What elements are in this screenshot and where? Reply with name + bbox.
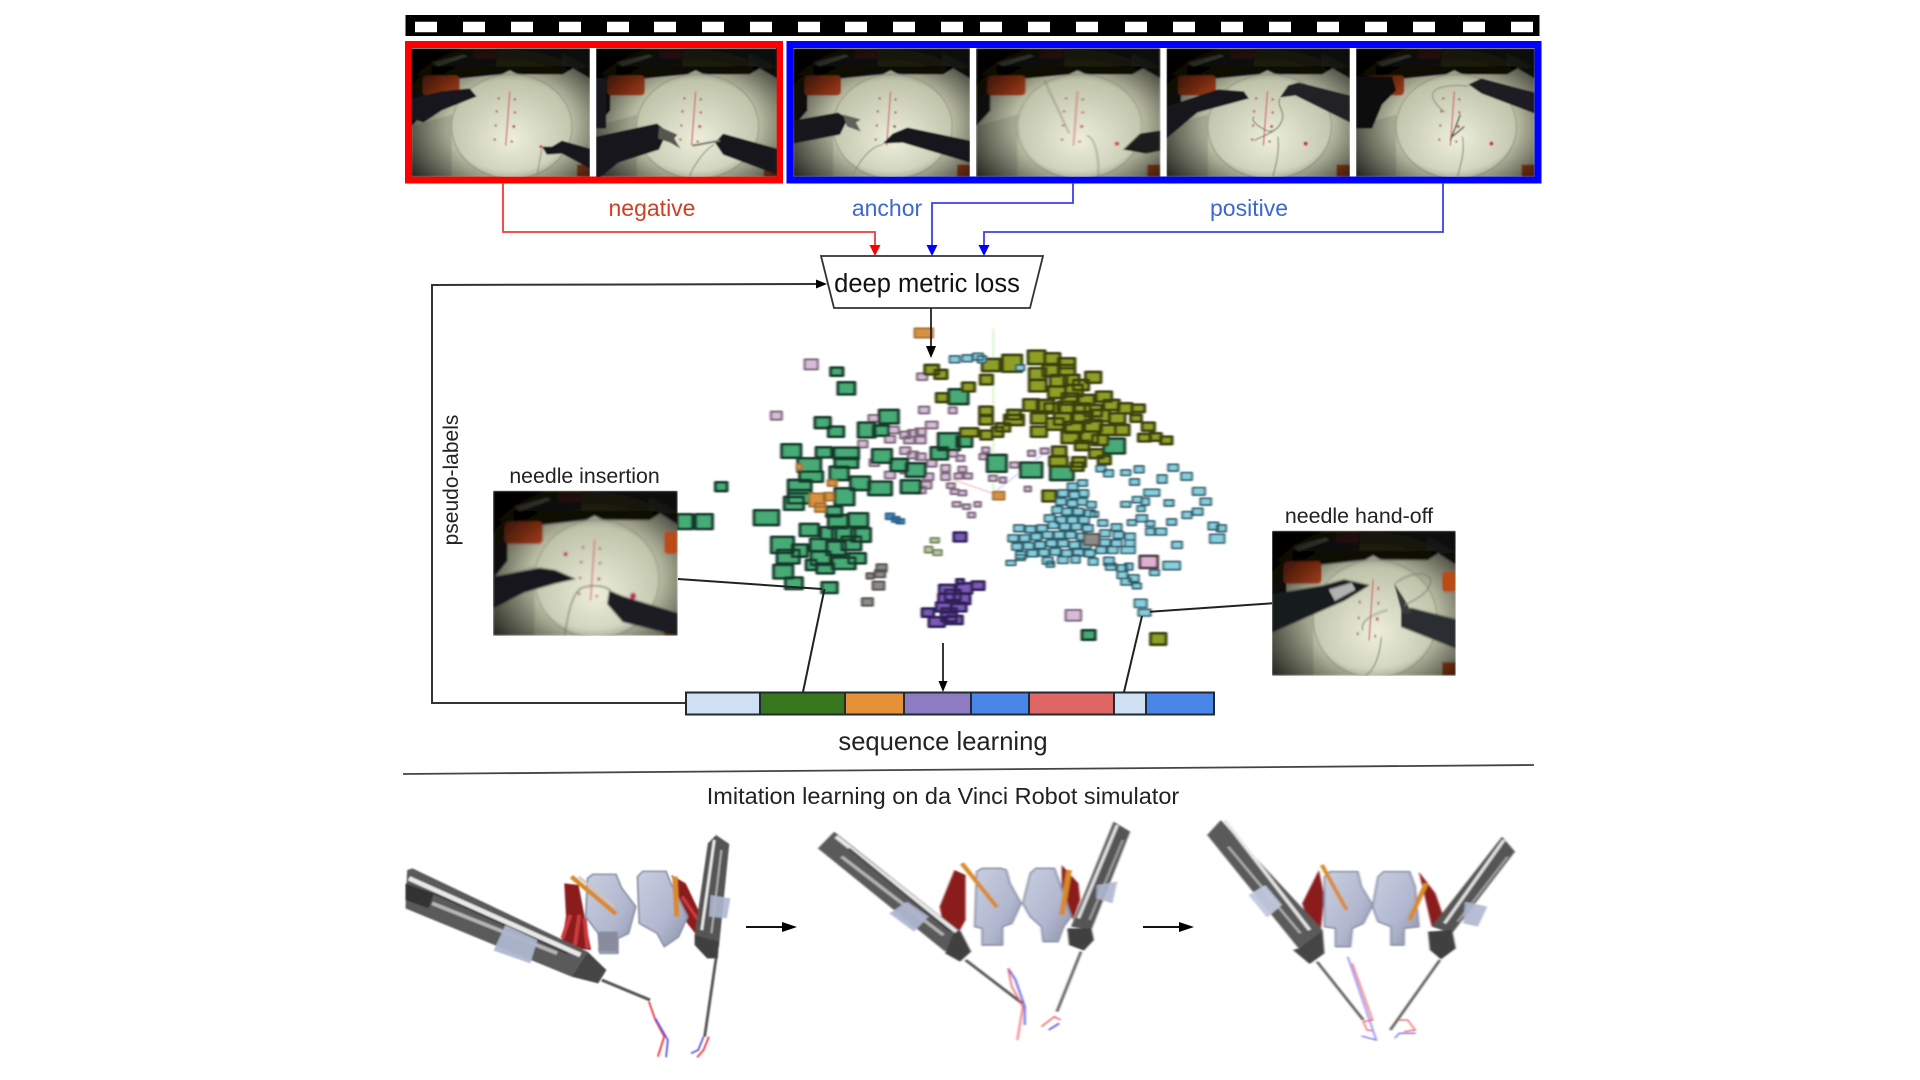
- panel: anchor and positive frames: [790, 44, 1538, 180]
- cluster: light blue frames: [950, 353, 1226, 616]
- connector: needle hand-off to scatter: [1150, 603, 1272, 612]
- label: pseudo-labels: pseudo-labels: [440, 415, 463, 545]
- label: needle hand-off: needle hand-off: [1285, 504, 1433, 528]
- video frame 4: [976, 48, 1160, 177]
- label: negative: negative: [609, 195, 695, 221]
- cluster: pale green frames: [925, 538, 942, 555]
- sequence bar: [686, 692, 1214, 714]
- arrow: scatter to sequence: [938, 643, 948, 692]
- connector: needle insertion to scatter: [678, 579, 822, 589]
- video frame 2: [596, 48, 777, 177]
- photo: needle insertion: [493, 490, 678, 636]
- film strip: [406, 15, 1540, 36]
- cluster: grey frames: [862, 534, 1099, 606]
- connector: sequence segment to needle insertion: [803, 589, 824, 692]
- robot simulator state 1: [405, 835, 730, 1057]
- deep metric loss box: deep metric loss: [834, 270, 1020, 298]
- cluster: purple frames: [922, 533, 984, 627]
- heading: imitation learning: Imitation learning on da Vinci Robot simulator: [707, 783, 1179, 809]
- label: anchor: anchor: [852, 195, 923, 221]
- cluster: orange frames: [797, 328, 1004, 512]
- axes: [949, 328, 1047, 493]
- arrow: negative to loss: [503, 183, 880, 256]
- arrow: loss to scatter: [926, 308, 936, 358]
- robot simulator state 3: [1207, 820, 1515, 1040]
- deep metric loss box: [821, 256, 1043, 308]
- label: positive: positive: [1210, 195, 1288, 221]
- scatter plot of embedded frames: [677, 328, 1226, 645]
- arrow: state 1 to state 2: [746, 922, 797, 932]
- cluster: blue frames: [886, 513, 904, 524]
- robot simulator state 2: [818, 822, 1130, 1040]
- cluster: green frames: [677, 368, 1125, 640]
- video frame 5: [1166, 48, 1350, 177]
- panel: negative frames: [408, 44, 780, 181]
- label: sequence learning: sequence learning: [838, 728, 1048, 756]
- photo: needle hand-off: [1272, 530, 1456, 676]
- video frame 3: [793, 48, 970, 177]
- label: needle insertion: needle insertion: [509, 464, 660, 488]
- cluster: olive frames: [925, 351, 1172, 645]
- arrow: positive to loss: [978, 183, 1443, 256]
- connector: sequence segment to needle hand-off: [1124, 616, 1142, 692]
- arrow: state 2 to state 3: [1143, 922, 1194, 932]
- video frame 1: [412, 48, 590, 177]
- cluster: pink frames: [771, 359, 1081, 621]
- cluster: magenta frame: [1140, 556, 1158, 568]
- feedback arrow: pseudo-labels: [432, 280, 827, 703]
- video frame 6: [1356, 48, 1535, 177]
- arrow: anchor to loss: [926, 183, 1073, 256]
- divider: [403, 765, 1534, 774]
